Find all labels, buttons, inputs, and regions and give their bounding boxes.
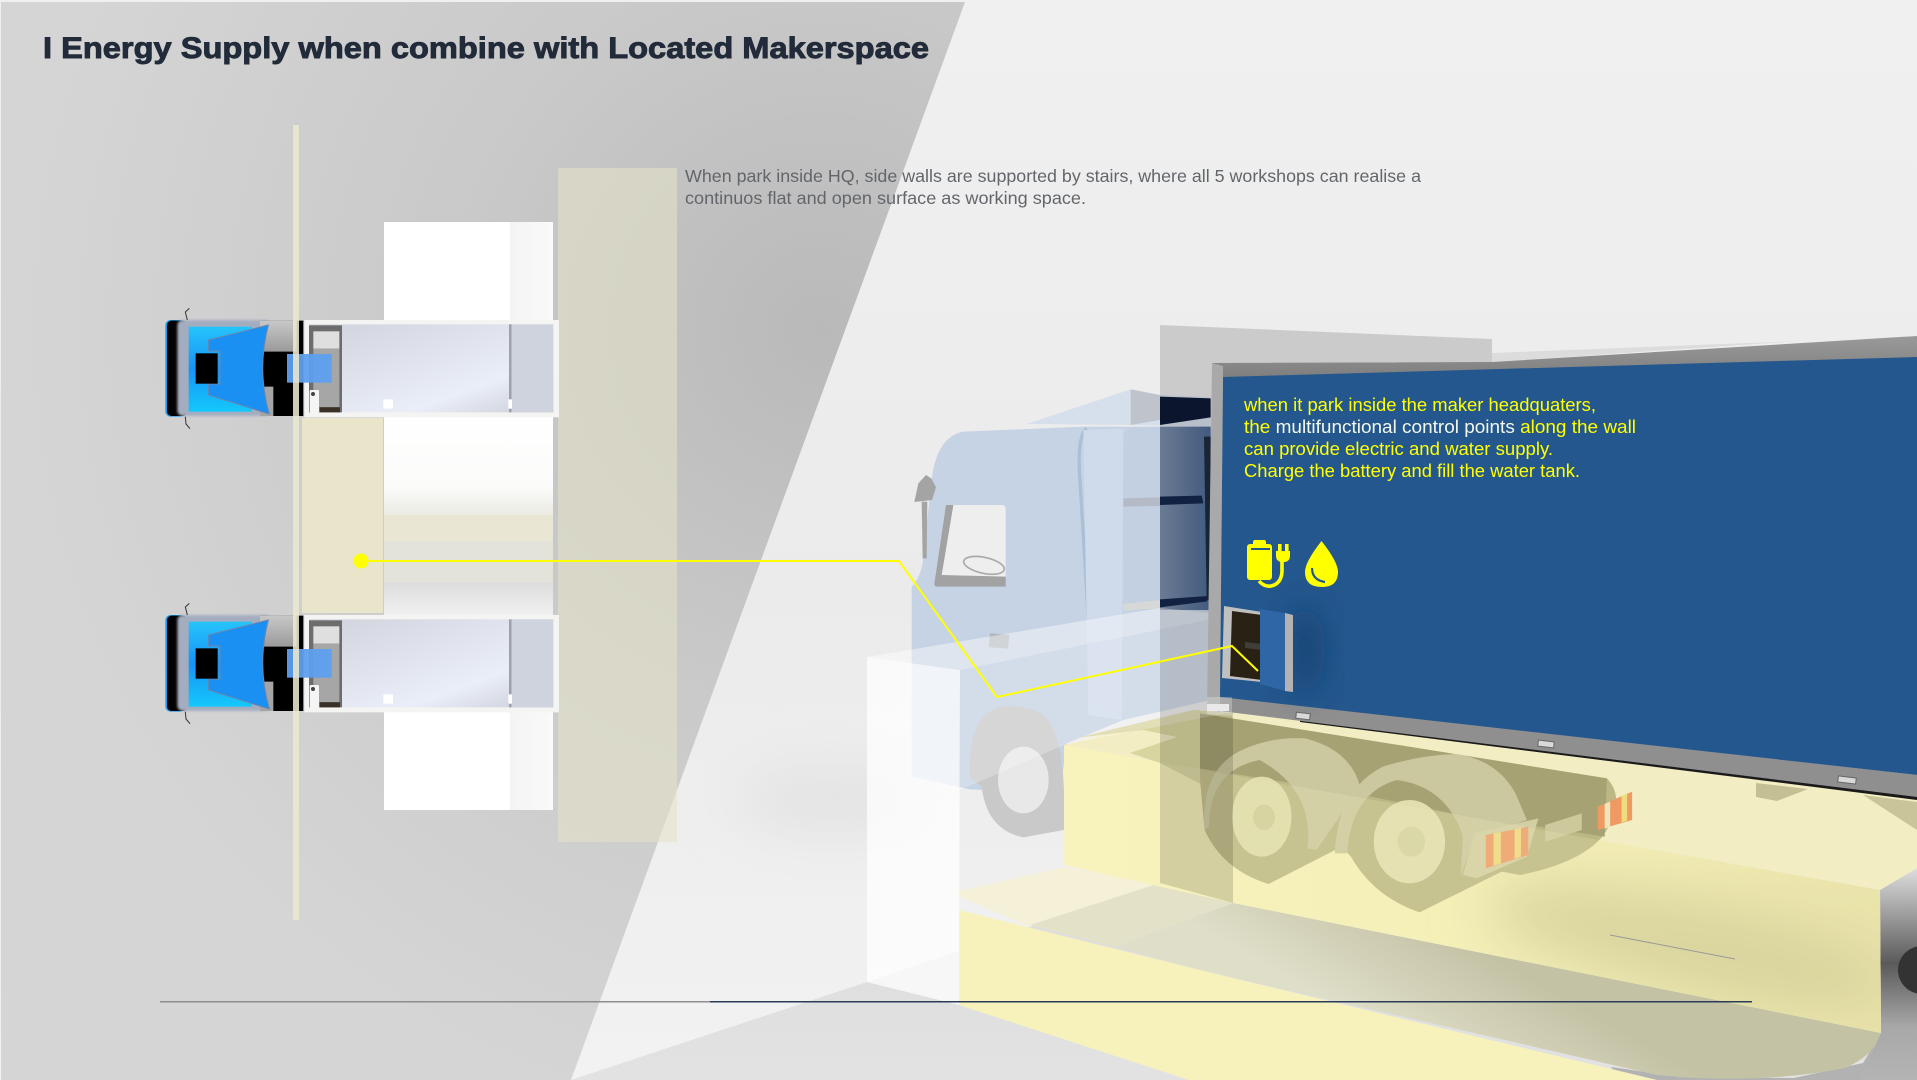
title: I Energy Supply when combine with Located Makerspace [43, 32, 929, 65]
text: workshop description [685, 166, 1421, 208]
floor: pale plane in front of truck [951, 867, 1160, 927]
pale base of wall over frame [1207, 697, 1232, 716]
reflector 1 [1463, 818, 1538, 878]
background: floor plane [571, 883, 1917, 1080]
door seam [1079, 428, 1088, 620]
yellow box: shaded patch [1490, 868, 1876, 1016]
faint floor line [1610, 935, 1735, 959]
frame clips [1296, 712, 1856, 784]
plan: top white workshop block [384, 222, 553, 322]
text: control points description: the multifunctional control points along the wall [1244, 416, 1636, 437]
wheel 1 [1204, 738, 1360, 857]
plan: large beige wall strip [558, 168, 677, 842]
connector line from plan to control box [354, 554, 1258, 697]
panel: blue truck side [1207, 336, 1917, 800]
translucent white wall: side plane [960, 615, 1232, 790]
baseline rule [160, 1001, 1752, 1002]
yellow box: front face [1064, 745, 1881, 1033]
floor shadow [735, 770, 925, 830]
frame sliver [1492, 341, 1800, 362]
reflector bar [1545, 813, 1582, 842]
cab body [912, 427, 1211, 793]
connector dot [354, 554, 368, 568]
plan: beige stair area [302, 418, 383, 613]
plan: truck 1 [165, 308, 559, 429]
yellow box front overlay [1064, 745, 1881, 1033]
wheel [970, 706, 1064, 837]
door shadow [1285, 606, 1325, 694]
panel: plan view of two trucks at the headquarters [165, 125, 677, 920]
dark floor at far right [1860, 868, 1917, 1080]
side fairing [1083, 428, 1123, 720]
icon: water drop [1305, 541, 1338, 587]
plan: thin beige vertical wall [293, 125, 299, 920]
background: left grey plane [1, 2, 965, 1080]
floor: translucent diagonal plane [1030, 883, 1233, 947]
dashboard and pillar [934, 505, 1006, 587]
truck cab [912, 389, 1211, 837]
text: control points description: when it park inside the maker headquaters, [1243, 394, 1596, 415]
text: workshop description: When park inside HQ, side walls are supported by stairs, where all 5 workshops can realise a [685, 166, 1421, 186]
control box opening [1222, 606, 1262, 682]
translucent white wall: top plane [867, 608, 1232, 670]
text: control points description: can provide electric and water supply. [1244, 438, 1553, 459]
frame left post [1207, 363, 1223, 712]
plan: truck 2 [165, 603, 559, 724]
floor: lower yellow strip [959, 910, 1657, 1080]
black lower seam [1300, 716, 1917, 800]
ghosted top surface shapes [1076, 710, 1232, 800]
mirror [914, 475, 936, 558]
translucent white wall: front face [867, 657, 960, 1005]
window [942, 505, 1006, 577]
text: workshop description: continuos flat and open surface as working space. [685, 188, 1086, 208]
yellow box [1064, 710, 1917, 1038]
under-frame brackets [1756, 783, 1917, 830]
dark chassis above the box edge [1200, 713, 1607, 837]
yellow box: top surface [1064, 710, 1917, 890]
plan: bottom white workshop block [384, 710, 553, 810]
sleeper side with dark bars [1123, 397, 1211, 611]
tyres and lower chassis [1200, 713, 1616, 912]
wheel 2 [1335, 754, 1527, 883]
text: control points description: Charge the battery and fill the water tank. [1244, 460, 1580, 481]
roof deflector [1027, 389, 1211, 427]
control box door edge [1285, 613, 1293, 692]
plan: middle workshop floor [384, 417, 553, 615]
translucent grey wall [1160, 325, 1492, 903]
icon: battery with plug [1247, 540, 1290, 586]
frame top and bottom [1212, 336, 1917, 378]
floor: grey base under curved shadow [1611, 1000, 1917, 1080]
text: control points description [1243, 394, 1636, 481]
blue surface [1220, 357, 1917, 775]
reflector 2 [1598, 792, 1632, 830]
ghosted rear chassis and wheels [1200, 713, 1632, 912]
floor: shaded area under yellow wall [1115, 903, 1881, 1079]
steering wheel [962, 553, 1006, 577]
control box door [1260, 609, 1285, 691]
